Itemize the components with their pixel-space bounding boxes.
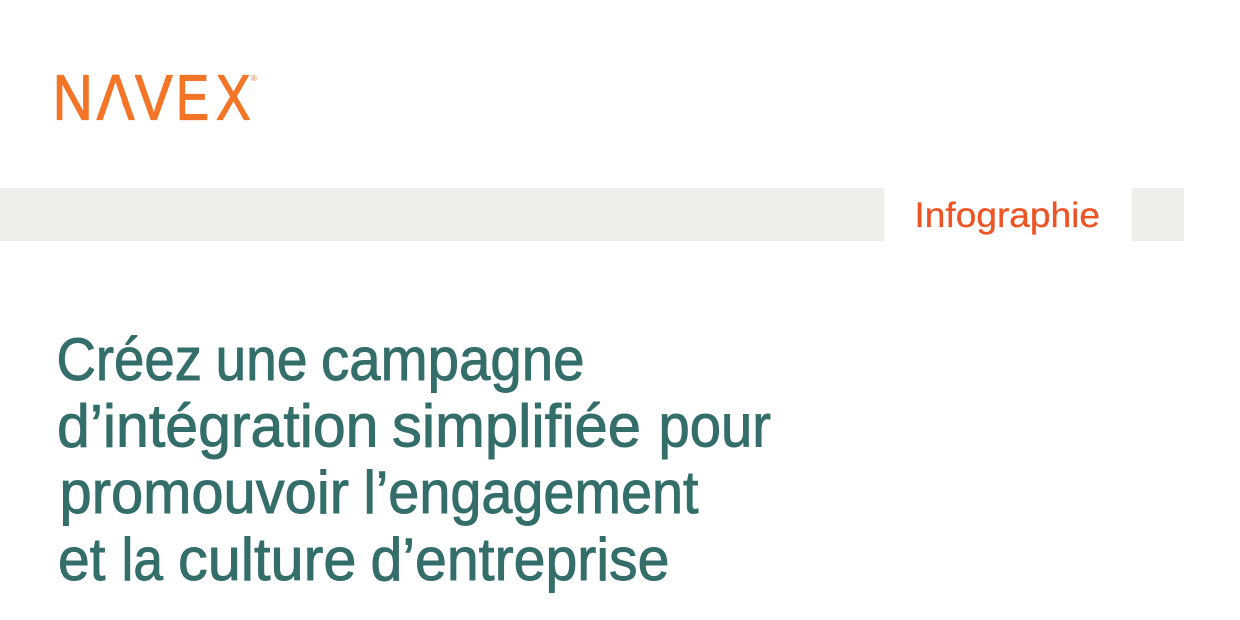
- title: culture: [178, 526, 356, 593]
- title: [56, 326, 771, 593]
- logo: NAVEX: X: [216, 62, 251, 134]
- title: d’intégration: [57, 392, 378, 460]
- title: campagne: [321, 326, 584, 393]
- title: une: [216, 326, 308, 393]
- logo: NAVEX: [53, 62, 257, 134]
- title: pour: [658, 392, 771, 460]
- title: promouvoir: [60, 459, 349, 526]
- logo: NAVEX: ®: [251, 74, 257, 83]
- title: et: [58, 526, 106, 593]
- banner label: Infographie: Infographie: [914, 196, 1100, 235]
- banner band: [0, 188, 1184, 241]
- logo: NAVEX: A: [97, 62, 135, 134]
- logo: NAVEX: E: [176, 62, 209, 134]
- title: la: [122, 526, 164, 593]
- logo: NAVEX: N: [53, 62, 93, 134]
- title: l’engagement: [364, 459, 699, 526]
- title: d’entreprise: [370, 526, 670, 593]
- logo: NAVEX: V: [135, 62, 173, 134]
- title: Créez: [56, 326, 202, 393]
- title: simplifiée: [392, 392, 641, 460]
